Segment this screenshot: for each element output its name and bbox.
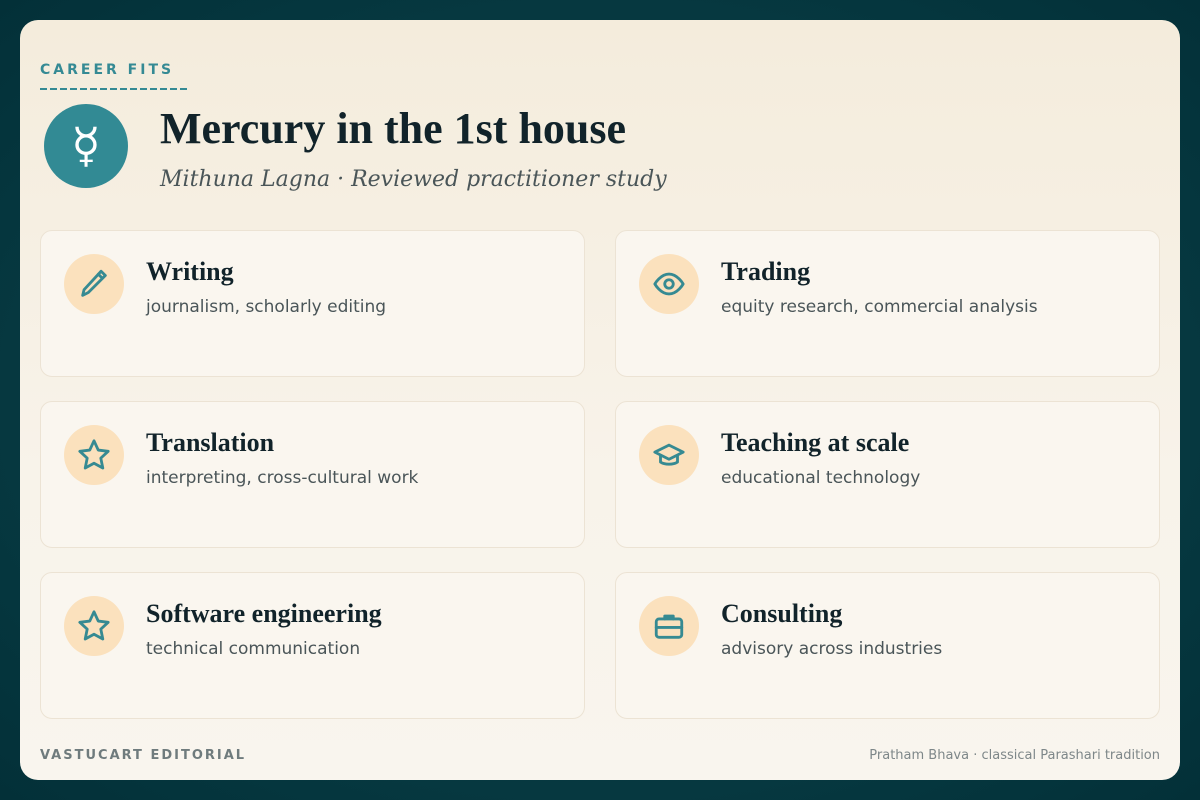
heading: translation: Translation xyxy=(146,428,274,457)
panel: software xyxy=(40,572,585,719)
text: writing: journalism, scholarly editing xyxy=(146,297,386,317)
text: consulting: advisory across industries xyxy=(721,639,942,659)
icon: briefcase xyxy=(639,596,699,656)
icon: eye xyxy=(639,254,699,314)
heading: software: Software engineering xyxy=(146,599,382,628)
heading: writing: Writing xyxy=(146,257,234,286)
text: trading: equity research, commercial analysis xyxy=(721,297,1038,317)
panel: consulting xyxy=(615,572,1160,719)
text: software: technical communication xyxy=(146,639,360,659)
text: translation: interpreting, cross-cultural work xyxy=(146,468,418,488)
icon: star xyxy=(64,596,124,656)
panel: teaching xyxy=(615,401,1160,548)
panel: translation xyxy=(40,401,585,548)
eyebrow label: CAREER FITS xyxy=(40,62,174,78)
heading: teaching: Teaching at scale xyxy=(721,428,909,457)
footer left: VASTUCART EDITORIAL xyxy=(40,748,246,763)
icon: mercury symbol xyxy=(44,104,128,188)
icon: star xyxy=(64,425,124,485)
subtitle: Mithuna Lagna · Reviewed practitioner study xyxy=(160,167,667,192)
panel: trading xyxy=(615,230,1160,377)
icon: pen xyxy=(64,254,124,314)
footer right: Pratham Bhava · classical Parashari tradition xyxy=(869,748,1160,763)
heading: trading: Trading xyxy=(721,257,810,286)
text: teaching: educational technology xyxy=(721,468,920,488)
heading: consulting: Consulting xyxy=(721,599,842,628)
panel: writing xyxy=(40,230,585,377)
icon: mercury symbol: ☿ xyxy=(71,118,101,174)
icon: graduation cap xyxy=(639,425,699,485)
title: Mercury in the 1st house xyxy=(160,104,626,153)
